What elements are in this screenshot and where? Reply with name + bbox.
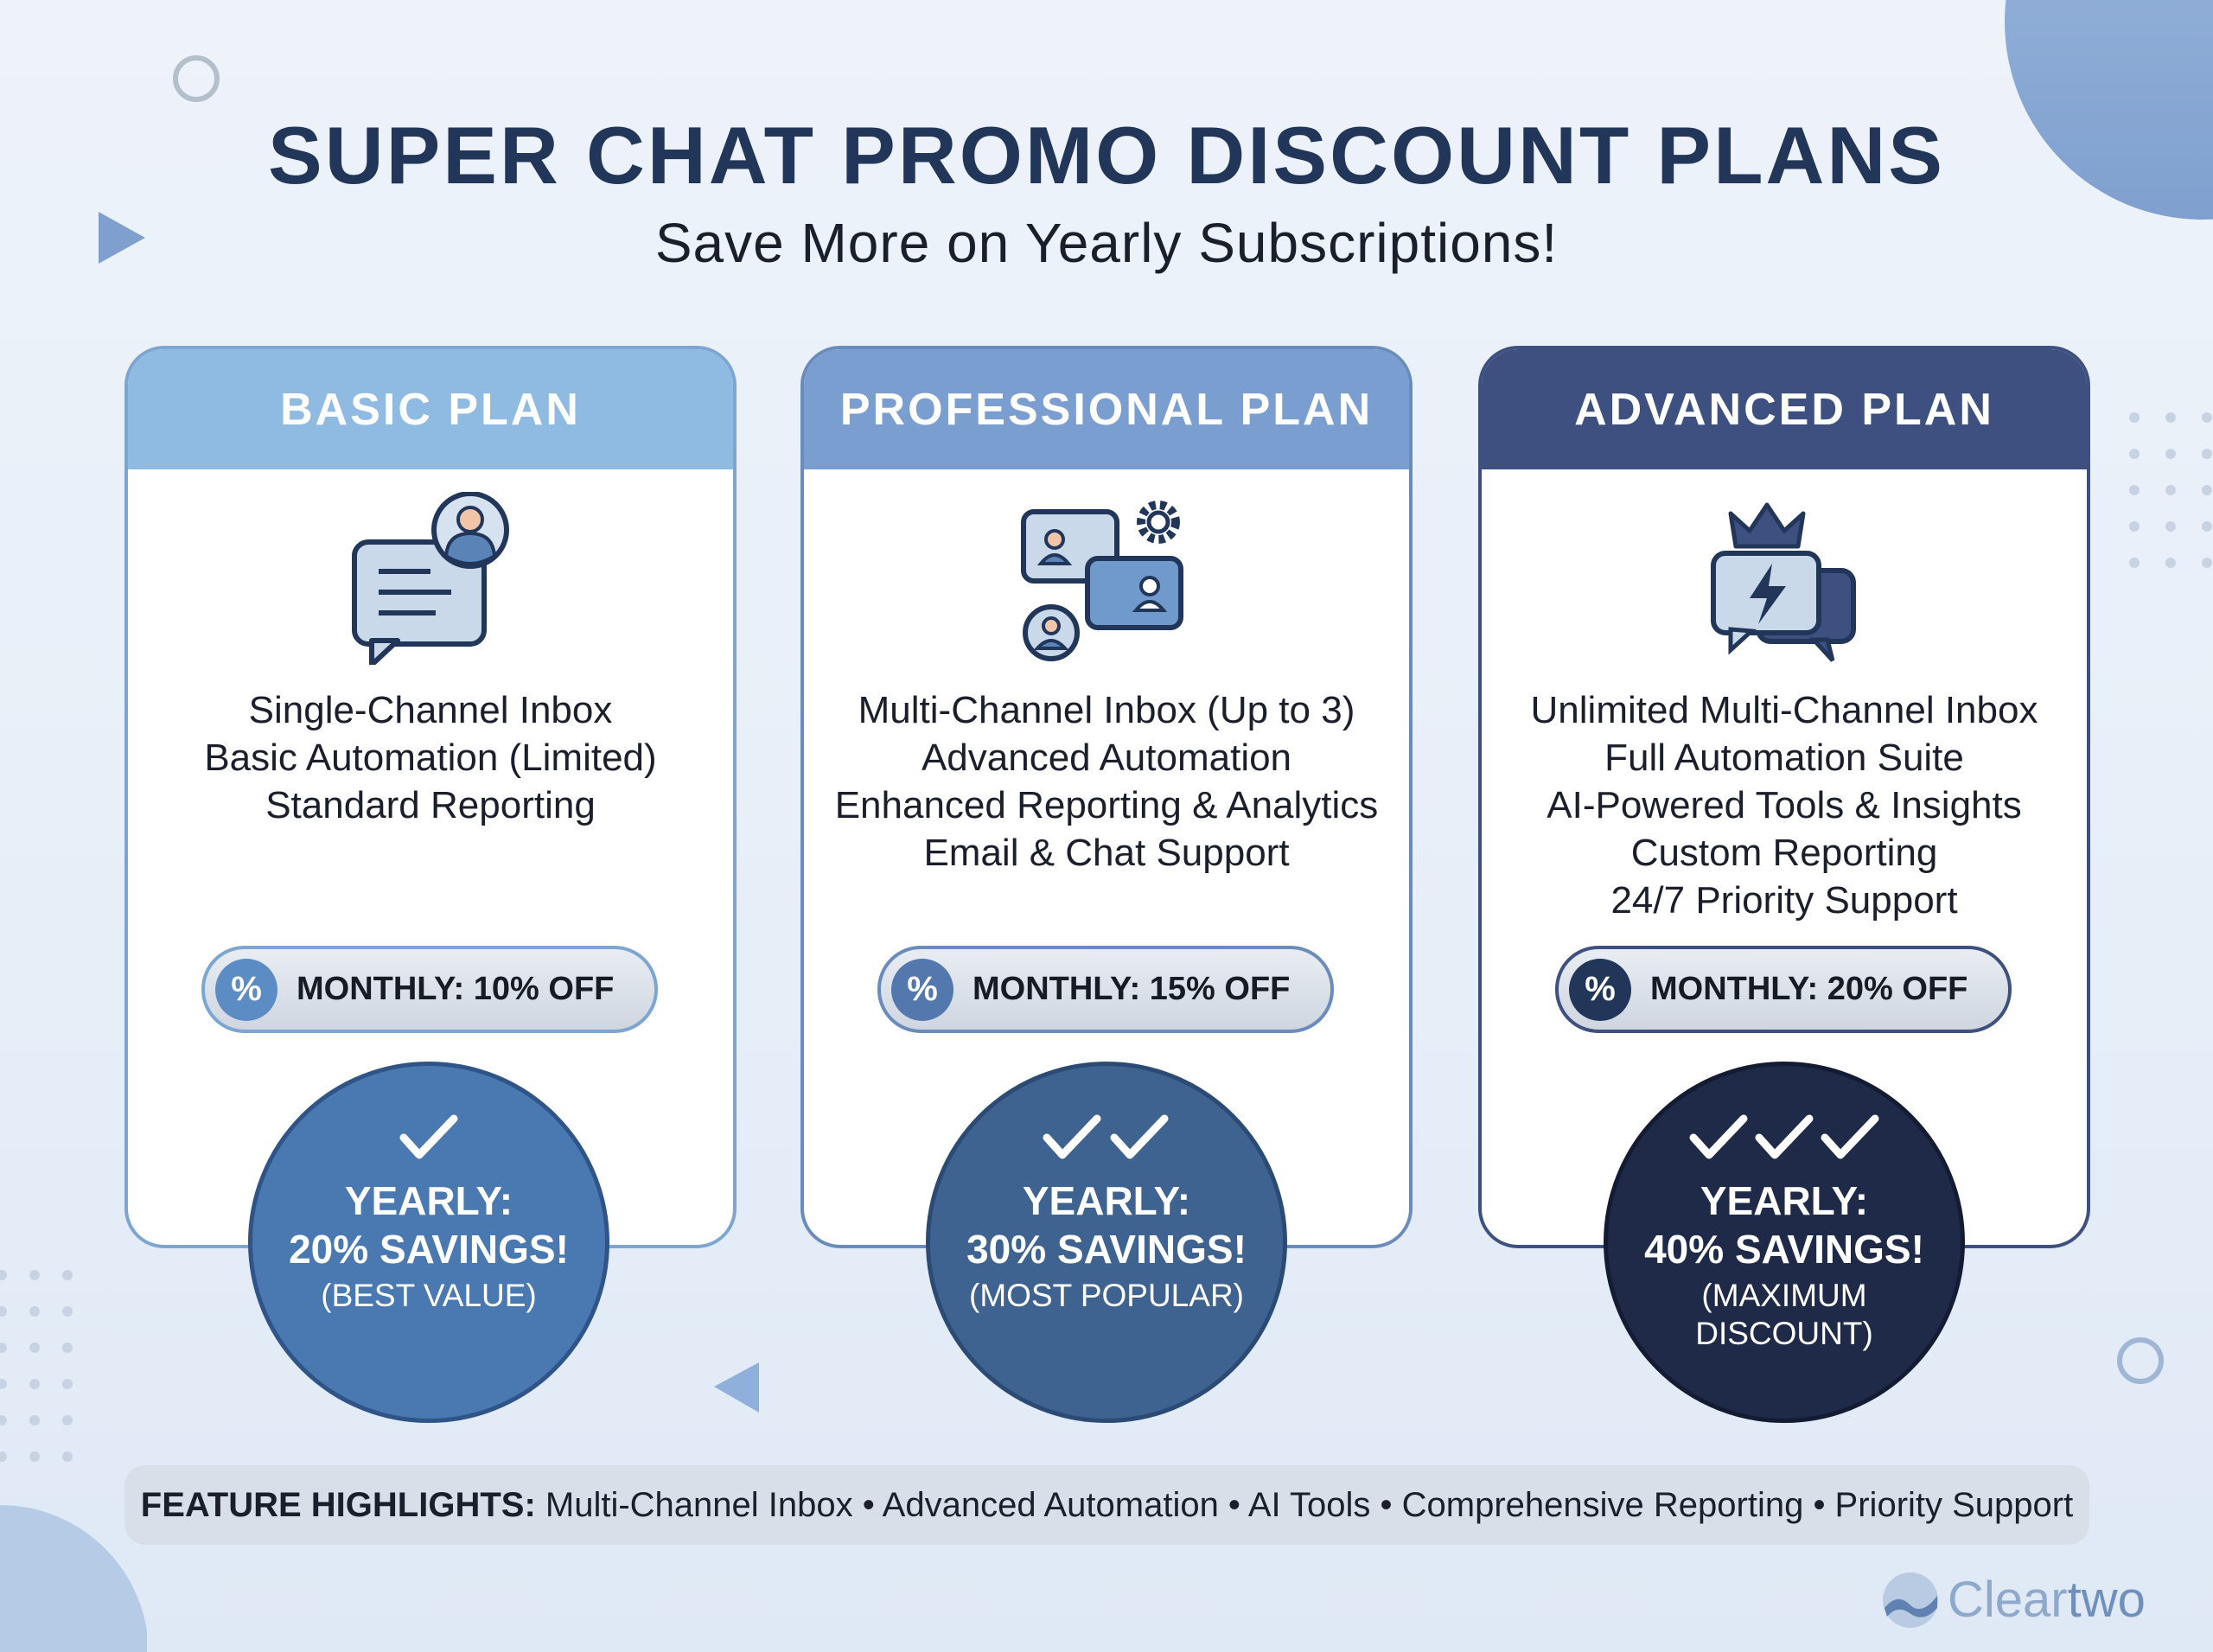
text: professional features: Multi-Channel Inbox (Up to 3) <box>858 689 1355 731</box>
icon: checks <box>1689 1115 1879 1158</box>
icon: crown chat <box>1711 503 1856 662</box>
subtitle: Save More on Yearly Subscriptions! <box>655 212 1558 274</box>
panel: advanced plan <box>1478 346 2090 1248</box>
text: advanced features <box>1531 689 2038 922</box>
badge: advanced yearly: (MAXIMUM <box>1701 1278 1867 1313</box>
decor: bottom-left circle <box>0 1505 147 1652</box>
text: advanced features: 24/7 Priority Support <box>1610 879 1958 922</box>
footer bar: feature highlights: FEATURE HIGHLIGHTS: <box>141 1485 536 1523</box>
badge: professional yearly: (MOST POPULAR) <box>969 1278 1244 1313</box>
decor: ring top-left <box>173 55 220 102</box>
badge: professional yearly <box>926 1062 1287 1423</box>
logo: cleartwo: Cleartwo <box>1948 1572 2146 1628</box>
pill: basic monthly <box>201 946 658 1033</box>
heading: basic: BASIC PLAN <box>280 384 581 434</box>
badge: basic yearly <box>248 1062 609 1423</box>
panel: professional plan <box>800 346 1413 1248</box>
text: professional features: Advanced Automation <box>922 737 1291 779</box>
icon: chat with user <box>352 492 509 665</box>
heading: professional <box>804 349 1409 469</box>
decor: top-right circle <box>2005 0 2213 220</box>
pill: professional monthly: MONTHLY: 15% OFF <box>973 971 1290 1007</box>
text: professional features <box>835 689 1378 874</box>
decor: dots left <box>0 1270 73 1462</box>
heading: professional: PROFESSIONAL PLAN <box>840 384 1373 434</box>
title: SUPER CHAT PROMO DISCOUNT PLANS <box>268 110 1945 201</box>
heading: advanced: ADVANCED PLAN <box>1574 384 1994 434</box>
footer bar: feature highlights <box>124 1465 2089 1545</box>
badge: advanced yearly: DISCOUNT) <box>1695 1316 1873 1351</box>
pill: advanced monthly: % <box>1585 970 1616 1008</box>
icon: checks <box>1043 1115 1169 1158</box>
badge: advanced yearly: 40% SAVINGS! <box>1644 1227 1924 1272</box>
pill: professional monthly: % <box>907 970 938 1008</box>
text: advanced features: Full Automation Suite <box>1604 737 1964 779</box>
text: professional features: Enhanced Reporting & Analytics <box>835 784 1378 826</box>
decor: triangle bottom <box>714 1362 759 1413</box>
badge: basic yearly: 20% SAVINGS! <box>289 1227 569 1272</box>
badge: professional yearly: 30% SAVINGS! <box>966 1227 1247 1272</box>
badge: basic yearly: YEARLY: <box>345 1178 513 1223</box>
badge: advanced yearly <box>1604 1062 1965 1423</box>
text: advanced features: AI-Powered Tools & Insights <box>1547 784 2022 826</box>
icon: multi chat <box>1021 501 1183 661</box>
pill: basic monthly: MONTHLY: 10% OFF <box>297 971 614 1007</box>
decor: dots right <box>2129 412 2212 568</box>
text: advanced features: Custom Reporting <box>1631 832 1937 874</box>
badge: basic yearly: (BEST VALUE) <box>321 1278 537 1313</box>
icon: check <box>399 1115 458 1158</box>
decor: triangle left <box>99 212 145 264</box>
decor: ring right <box>2117 1337 2164 1384</box>
text: advanced features: Unlimited Multi-Channel Inbox <box>1531 689 2038 731</box>
pill: advanced monthly: MONTHLY: 20% OFF <box>1650 971 1967 1007</box>
panel: basic plan <box>124 346 737 1248</box>
text: basic features: Standard Reporting <box>265 784 596 826</box>
badge: advanced yearly: YEARLY: <box>1700 1178 1868 1223</box>
pill: professional monthly <box>877 946 1334 1033</box>
text: basic features <box>204 689 657 826</box>
heading: advanced <box>1482 349 2087 469</box>
pill: basic monthly: % <box>231 970 262 1008</box>
footer bar: feature highlights: Multi-Channel Inbox • Advanced Automation • AI Tools • Comprehensive Reporting • Priority Support <box>545 1485 2073 1523</box>
text: basic features: Basic Automation (Limited) <box>204 737 657 779</box>
heading: basic <box>128 349 733 469</box>
text: professional features: Email & Chat Support <box>923 832 1290 874</box>
pill: advanced monthly <box>1555 946 2012 1033</box>
text: basic features: Single-Channel Inbox <box>249 689 612 731</box>
badge: professional yearly: YEARLY: <box>1023 1178 1190 1223</box>
